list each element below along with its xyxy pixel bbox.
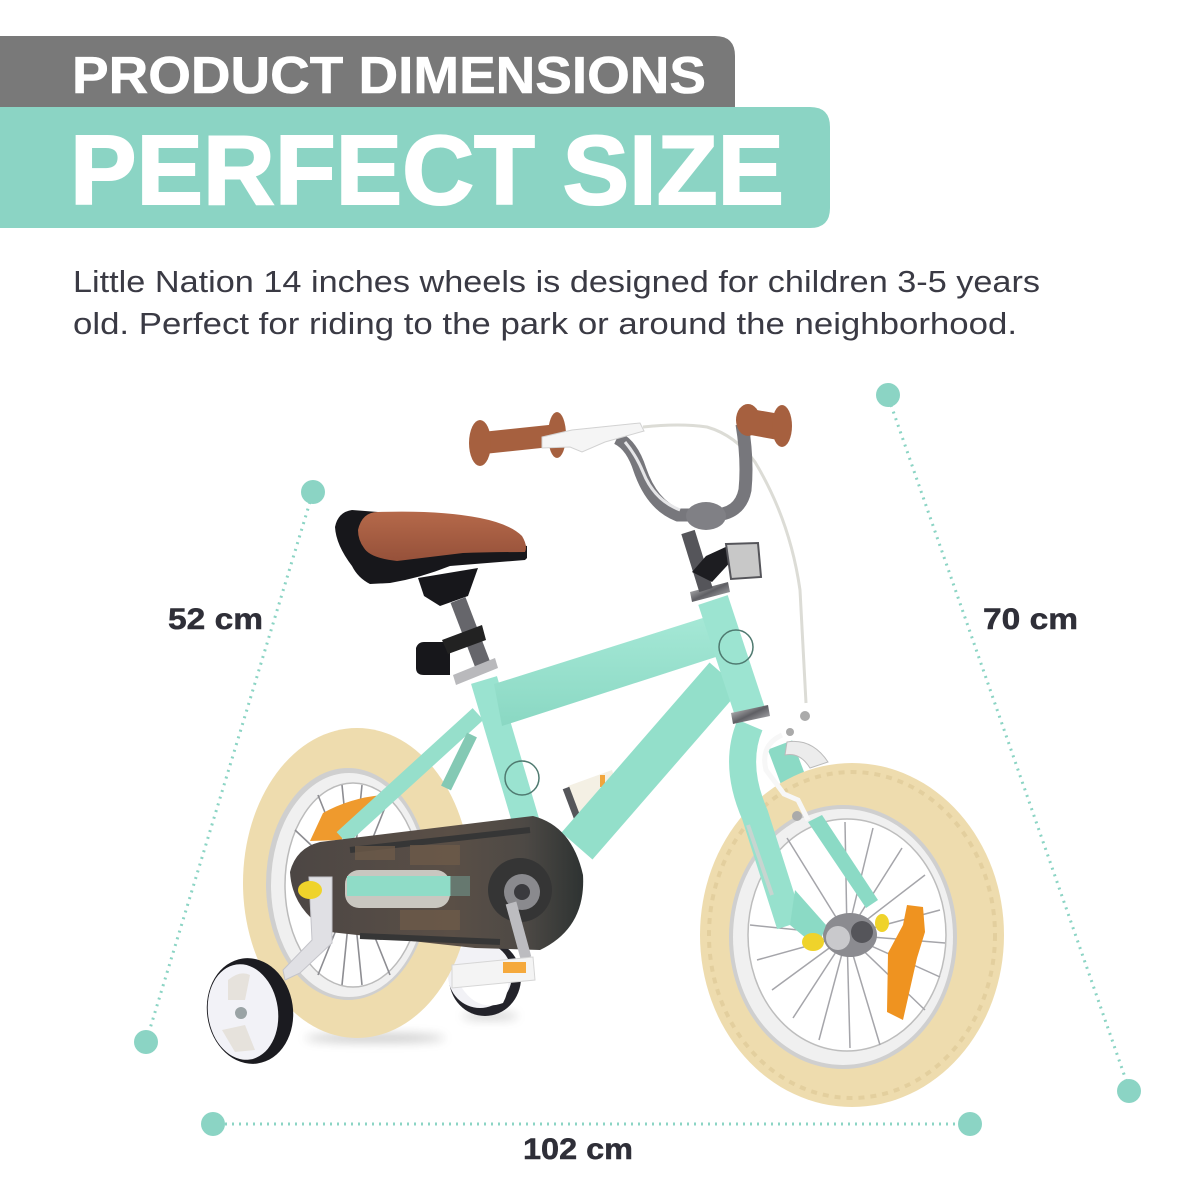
crank and pedal <box>452 903 535 988</box>
header band: product dimensions: PRODUCT DIMENSIONS <box>72 47 706 105</box>
saddle clamp <box>418 568 478 606</box>
brake caliper arm <box>765 735 808 820</box>
front fork near leg <box>743 725 826 951</box>
dimension: height 70 cm: 70 cm <box>983 603 1078 636</box>
saddle <box>335 510 527 584</box>
bicycle illustration <box>200 404 1004 1107</box>
far training wheel <box>448 940 521 1016</box>
front fork far leg top <box>780 745 812 830</box>
header band: perfect size: PERFECT SIZE <box>70 115 784 225</box>
front fork far leg lower <box>808 815 878 908</box>
dimension: height 70 cm <box>876 383 1141 1103</box>
dimension: length 102 cm: 102 cm <box>523 1133 633 1166</box>
description text: old. Perfect for riding to the park or around the neighborhood. <box>73 306 1017 341</box>
right grip <box>736 404 792 447</box>
training wheel bracket <box>283 877 332 980</box>
stem and reflector <box>688 532 761 590</box>
brake clamp <box>786 711 810 821</box>
dimension: length 102 cm <box>201 1112 982 1166</box>
frame <box>342 600 753 846</box>
front wheel <box>700 763 1004 1107</box>
description text: Little Nation 14 inches wheels is designed for children 3-5 years <box>73 264 1040 299</box>
head tube rings <box>690 582 770 724</box>
chain guard <box>290 816 583 950</box>
ground shadows <box>305 1013 518 1042</box>
front hub <box>823 913 889 957</box>
rear wheel <box>243 728 471 1038</box>
handlebar <box>469 404 792 530</box>
description text <box>73 264 1040 341</box>
far pedal <box>566 770 622 825</box>
header band: product dimensions <box>0 36 735 108</box>
brake shoes <box>785 741 828 768</box>
seat post <box>416 600 498 685</box>
training wheel <box>200 953 300 1069</box>
brake cable <box>643 425 806 703</box>
dimension: seat height 52 cm <box>134 480 325 1054</box>
left grip <box>469 412 566 466</box>
dimension: seat height 52 cm: 52 cm <box>168 603 263 636</box>
